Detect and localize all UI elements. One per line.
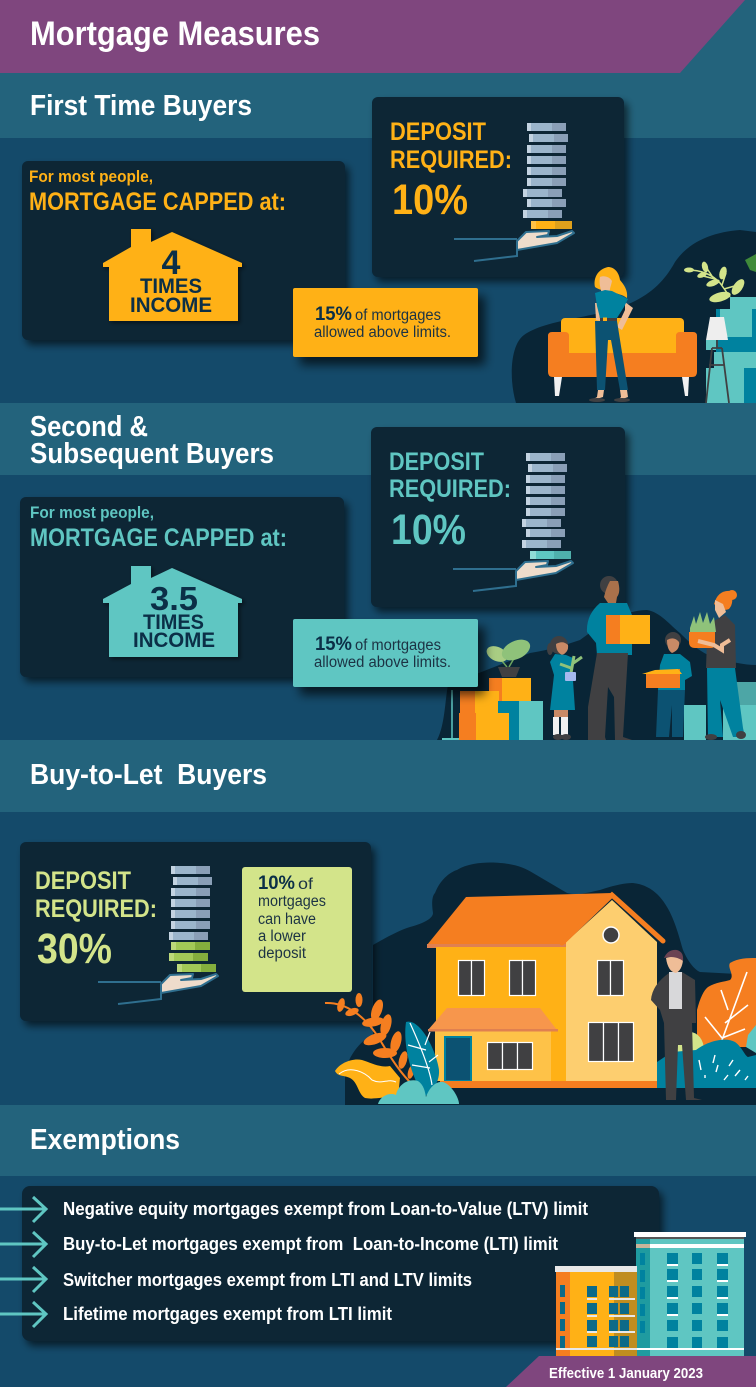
boxes right bbox=[684, 682, 756, 740]
card: deposit required 10%: REQUIRED: bbox=[390, 146, 512, 174]
icon: house 4 times income bbox=[103, 229, 242, 321]
callout: 15% of mortgages: of mortgages bbox=[355, 637, 441, 654]
illustration: apartment buildings bbox=[555, 1232, 746, 1356]
icon: coins on hand bbox=[98, 866, 218, 1004]
panel: buy-to-let buyers bbox=[0, 740, 756, 1105]
icon: coins on hand bbox=[453, 453, 573, 591]
panel: first time buyers bbox=[0, 73, 756, 403]
illustration: house bbox=[427, 893, 663, 1088]
boy with box bbox=[642, 632, 692, 737]
card: mortgage cap: MORTGAGE CAPPED at: bbox=[30, 524, 287, 552]
icon: house 4 times income: INCOME bbox=[130, 294, 212, 317]
arrow 2 bbox=[0, 1232, 46, 1257]
icon: house 3.5 times income: INCOME bbox=[133, 629, 215, 652]
icon: coins on hand bbox=[454, 123, 574, 261]
card: deposit required 10%: 10% bbox=[392, 176, 468, 224]
callout: 15% of mortgages: of mortgages bbox=[355, 307, 441, 324]
card: deposit required 30%: 30% bbox=[37, 925, 112, 973]
illustration backdrop: blob bbox=[345, 863, 756, 1105]
callout: 15% of mortgages: allowed above limits. bbox=[314, 654, 451, 671]
card: deposit required 30%: REQUIRED: bbox=[35, 895, 157, 923]
title: Mortgage Measures bbox=[30, 15, 320, 53]
heading: buy-to-let buyers: Buy-to-Let Buyers bbox=[30, 759, 267, 791]
girl bbox=[547, 636, 582, 740]
list item 3: Switcher mortgages exempt from LTI and LTV limits bbox=[63, 1269, 472, 1290]
icon: house 3.5 times income: TIMES bbox=[143, 611, 204, 634]
footer banner: effective date bbox=[506, 1356, 756, 1387]
card: deposit required 30% bbox=[20, 842, 371, 1021]
illustration: family moving bbox=[547, 576, 756, 740]
illustration backdrop: blob bbox=[512, 230, 756, 403]
card: exemptions list bbox=[0, 1186, 659, 1341]
callout: 15% of mortgages: 15% bbox=[315, 634, 352, 655]
heading: second and subsequent buyers bbox=[30, 411, 274, 470]
heading: first time buyers: First Time Buyers bbox=[30, 90, 252, 122]
list item 2: Buy-to-Let mortgages exempt from Loan-to-Income (LTI) limit bbox=[63, 1233, 558, 1254]
callout: 15% of mortgages bbox=[293, 619, 478, 687]
callout: 15% of mortgages: 15% bbox=[315, 304, 352, 325]
card: deposit required 10%: REQUIRED: bbox=[389, 475, 511, 503]
card: deposit required 10%: DEPOSIT bbox=[390, 118, 486, 146]
illustration backdrop: blob bbox=[437, 610, 756, 740]
arrow 4 bbox=[0, 1302, 46, 1327]
card: deposit required 10%: DEPOSIT bbox=[389, 448, 484, 476]
man with box bbox=[587, 576, 650, 740]
card: mortgage cap: For most people, bbox=[30, 503, 154, 522]
card: mortgage cap: MORTGAGE CAPPED at: bbox=[29, 188, 286, 216]
footer banner: effective date: Effective 1 January 2023 bbox=[549, 1366, 703, 1382]
callout: 15% of mortgages bbox=[293, 288, 478, 357]
callout: 10% of mortgages: 10% bbox=[258, 873, 295, 894]
arrow 3 bbox=[0, 1267, 46, 1292]
card: deposit required 30%: DEPOSIT bbox=[35, 867, 131, 895]
card: deposit required 10% bbox=[372, 97, 624, 277]
illustration: left plants bbox=[325, 993, 459, 1104]
icon: house 4 times income: 4 bbox=[162, 244, 181, 282]
woman with plant bbox=[689, 590, 746, 740]
illustration: woman and sofa bbox=[548, 267, 697, 402]
illustration: lamp, boxes and plant bbox=[684, 254, 756, 403]
card: mortgage cap bbox=[20, 497, 344, 677]
illustration: right plants bbox=[657, 958, 756, 1088]
illustration: man in suit bbox=[651, 950, 702, 1100]
callout: 10% of mortgages: can have bbox=[258, 911, 316, 928]
icon: house 3.5 times income: 3.5 bbox=[150, 580, 198, 617]
list item 4: Lifetime mortgages exempt from LTI limit bbox=[63, 1303, 392, 1324]
callout: 10% of mortgages: deposit bbox=[258, 945, 307, 962]
icon: house 4 times income: TIMES bbox=[140, 275, 202, 298]
card: deposit required 10%: 10% bbox=[391, 506, 466, 554]
callout: 15% of mortgages: allowed above limits. bbox=[314, 324, 451, 341]
card: deposit required 10% bbox=[371, 427, 625, 607]
header banner bbox=[0, 0, 756, 73]
callout: 10% of mortgages: of bbox=[298, 876, 314, 893]
panel: second and subsequent buyers bbox=[0, 403, 756, 740]
list item 1: Negative equity mortgages exempt from Loan-to-Value (LTV) limit bbox=[63, 1198, 588, 1219]
callout: 10% of mortgages: mortgages bbox=[258, 893, 326, 910]
card: mortgage cap bbox=[22, 161, 345, 340]
arrow 1 bbox=[0, 1197, 46, 1222]
heading: exemptions: Exemptions bbox=[30, 1124, 180, 1156]
card: mortgage cap: For most people, bbox=[29, 167, 153, 186]
heading: second and subsequent buyers: Second & bbox=[30, 411, 148, 443]
illustration: boxes and plant bbox=[442, 636, 543, 740]
heading: second and subsequent buyers: Subsequent Buyers bbox=[30, 438, 274, 470]
icon: house 3.5 times income bbox=[103, 566, 242, 657]
callout: 10% of mortgages: a lower bbox=[258, 928, 306, 945]
callout: 10% of mortgages bbox=[242, 867, 352, 992]
panel: exemptions bbox=[0, 1105, 756, 1387]
